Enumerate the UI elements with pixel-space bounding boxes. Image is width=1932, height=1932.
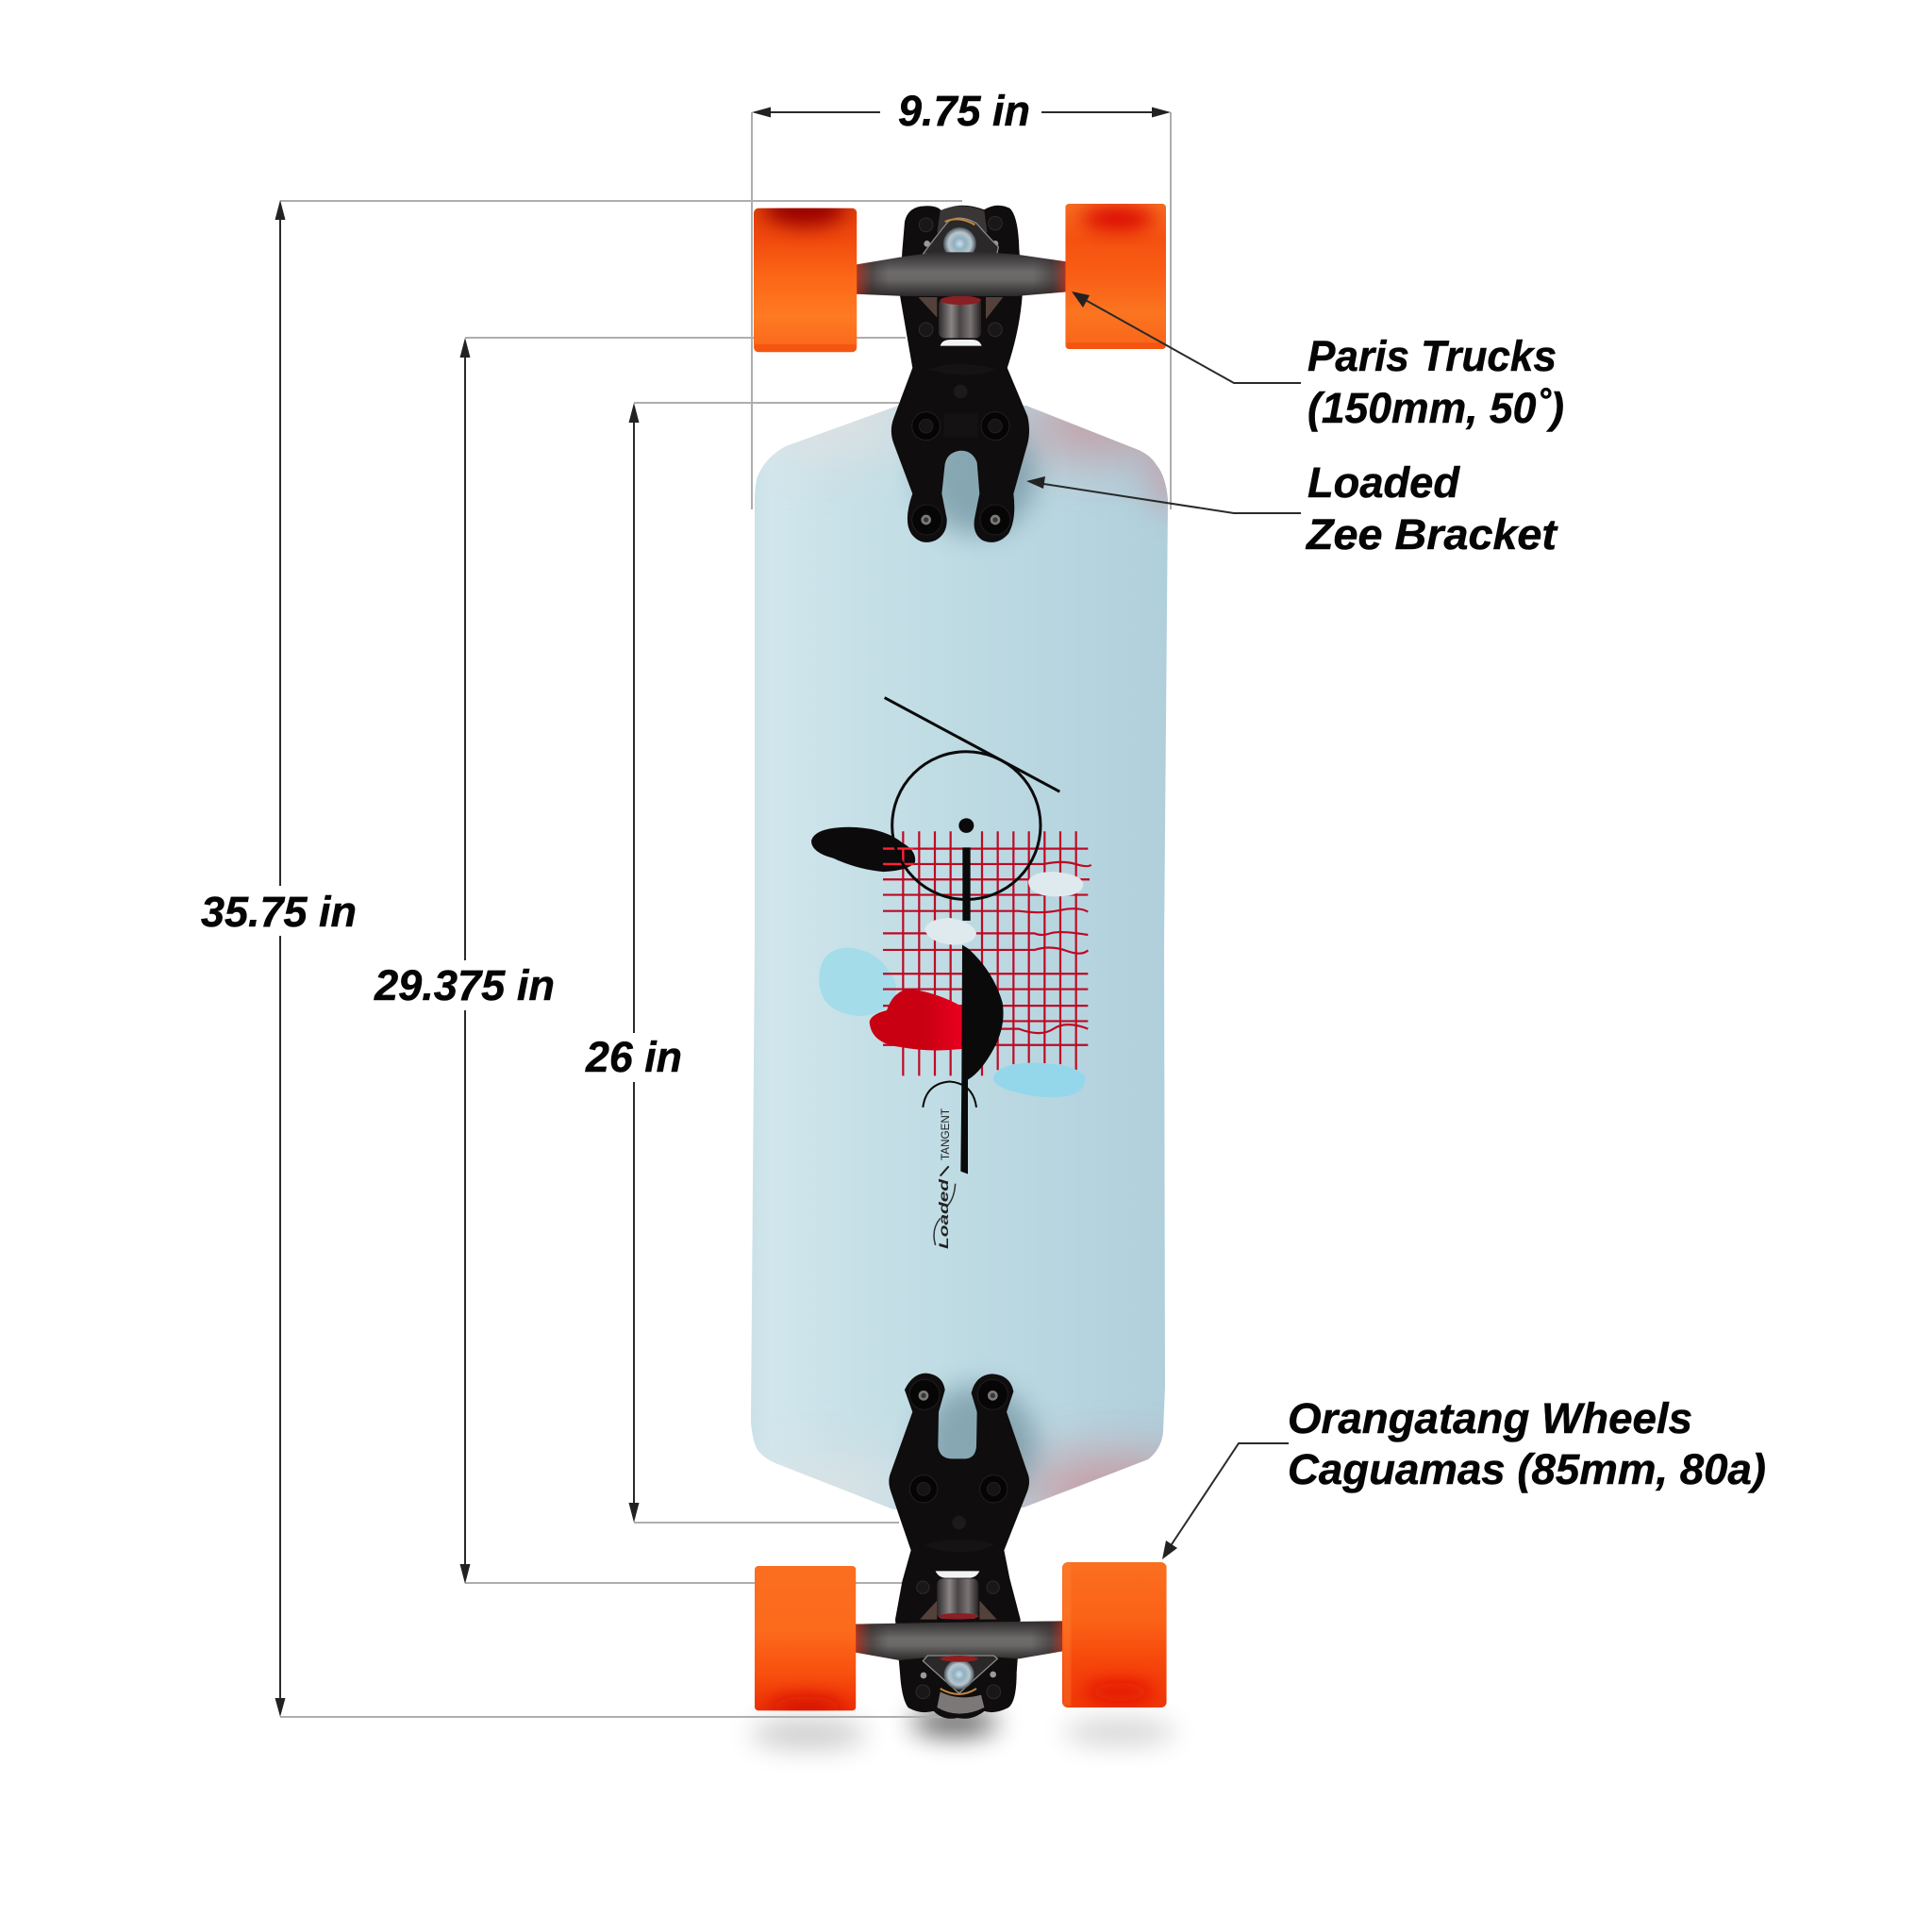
deck text: Loaded: Loaded (936, 1178, 951, 1249)
bracket (890, 1374, 1028, 1718)
callout: Paris Trucks (1072, 291, 1564, 432)
bright red grid over blob (883, 849, 913, 864)
bottom truck (755, 1374, 1167, 1719)
top truck (754, 192, 1166, 541)
tangent line (885, 698, 1059, 791)
arc (923, 1082, 976, 1108)
length extension lines (280, 201, 962, 1717)
pivot cylinder (920, 1571, 997, 1620)
dimension: wheelbase 29.375 in: 29.375 in (374, 961, 555, 1009)
red blob (870, 990, 962, 1050)
dimension: overall length 35.75 in (201, 200, 357, 1717)
logo swoosh (934, 1184, 956, 1245)
deck text: TANGENT: TANGENT (939, 1108, 952, 1160)
callout: Loaded Zee Bracket: Loaded (1307, 458, 1461, 507)
wheel: top left (754, 192, 857, 352)
dot (958, 818, 974, 833)
callout: Paris Trucks: (150mm, 50˚) (1307, 384, 1564, 432)
kingpin and nut (923, 1656, 997, 1714)
dimension: width 9.75 in: 9.75 in (898, 87, 1030, 135)
dimension: overall length 35.75 in: 35.75 in (201, 888, 357, 936)
callout: Orangatang Wheels: Caguamas (85mm, 80a) (1288, 1445, 1766, 1493)
callout: Loaded Zee Bracket (1026, 458, 1558, 558)
circle (892, 752, 1041, 899)
slash (941, 1166, 949, 1176)
axle (856, 1621, 1064, 1660)
longboard deck (751, 406, 1168, 1509)
callout: Orangatang Wheels: Orangatang Wheels (1288, 1394, 1692, 1442)
bracket mounting details (909, 1379, 1008, 1699)
white blob right (1028, 872, 1083, 896)
bracket mounting details (912, 216, 1010, 535)
deck graphic (811, 698, 1091, 1245)
width extension lines (752, 112, 1171, 509)
bracket (892, 207, 1028, 541)
dimension: deck length 26 in: 26 in (585, 1033, 682, 1081)
axle (856, 252, 1067, 296)
callout: Orangatang Wheels (1162, 1394, 1766, 1559)
blue blob left (819, 947, 896, 1016)
kingpin and nut (923, 206, 998, 261)
ground shadows (750, 1709, 1176, 1749)
lower half-shape and bar (960, 945, 1004, 1174)
pivot cylinder (918, 296, 1003, 346)
dimension: width 9.75 in (752, 87, 1171, 135)
red grid (883, 831, 1091, 1075)
callout: Paris Trucks: Paris Trucks (1307, 332, 1557, 380)
wheel: bottom right (1062, 1562, 1167, 1707)
dimension: deck length 26 in (585, 403, 682, 1523)
black blob left (811, 827, 915, 872)
wheel: bottom left (755, 1566, 856, 1719)
dimension: wheelbase 29.375 in (374, 338, 555, 1584)
blue blob right (993, 1063, 1085, 1097)
upper bar (962, 847, 971, 921)
callout: Loaded Zee Bracket: Zee Bracket (1305, 510, 1558, 558)
white blob centre (924, 918, 976, 945)
wheel: top right (1065, 204, 1166, 349)
